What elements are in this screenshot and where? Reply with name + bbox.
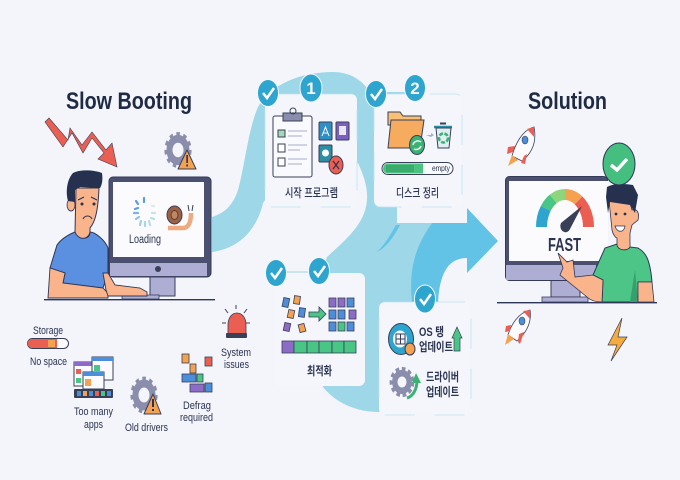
happy person — [558, 143, 654, 302]
check badge — [414, 285, 436, 313]
icon: recycle bin — [434, 124, 452, 148]
neck and face — [609, 200, 639, 250]
number badge 2: 2 — [410, 79, 420, 98]
hair — [67, 170, 102, 202]
check badge — [366, 80, 404, 108]
loading label: Loading — [129, 234, 161, 246]
icon: rocket bottom — [505, 310, 530, 345]
label: 디스크 정리 — [396, 186, 439, 200]
storage item: No space — [30, 356, 67, 368]
floor line left — [44, 299, 215, 300]
label: OS update: 업데이트 — [419, 340, 453, 354]
panel: step 2 disk cleanup — [366, 74, 462, 207]
label: OS update — [419, 325, 453, 354]
storage bar: empty — [432, 164, 450, 173]
defrag required item: Defrag — [183, 400, 211, 412]
hair — [606, 184, 638, 213]
left arm — [48, 268, 108, 298]
FAST label: FAST — [548, 235, 581, 255]
system issues item: issues — [224, 359, 249, 371]
heading: Solution: Solution — [528, 88, 607, 115]
too many apps item — [74, 357, 113, 431]
spinner — [134, 198, 155, 226]
icon: green up arrow — [452, 327, 462, 351]
label: driver update: 드라이버 — [426, 370, 459, 384]
storage item — [28, 325, 68, 368]
flow arrow: dark blue — [377, 208, 498, 302]
too many apps item: apps — [84, 419, 103, 431]
icon: driver gear — [391, 369, 421, 398]
icon: app tiles — [319, 122, 349, 174]
check badge — [258, 80, 278, 106]
right arm — [103, 273, 147, 296]
icon: lightning bolt — [608, 318, 627, 361]
ear — [67, 199, 75, 211]
icon: snail — [167, 205, 193, 228]
torso — [593, 244, 652, 302]
icon: windows update — [388, 324, 415, 355]
gauge needle — [560, 206, 582, 232]
neck and face — [75, 188, 99, 238]
system issues item: System — [221, 347, 251, 359]
too many apps item: Too many — [74, 406, 113, 418]
sad face — [78, 197, 97, 219]
torso — [50, 232, 108, 288]
check badges — [266, 258, 330, 286]
smile — [615, 213, 626, 231]
green check badge — [603, 143, 635, 185]
defrag required item — [180, 354, 213, 424]
label: 시작 프로그램 — [285, 186, 338, 200]
panel: step 4 updates — [379, 285, 471, 415]
system issues item — [221, 305, 251, 371]
panel: step 3 optimize — [266, 258, 365, 386]
floor line right — [497, 302, 657, 303]
number badge 1: 1 — [306, 79, 316, 98]
background patch under card 2 — [397, 200, 467, 223]
icon: falling red arrow — [45, 118, 117, 167]
left monitor — [109, 177, 211, 299]
heading: Slow Booting: Slow Booting — [66, 88, 192, 115]
shirt shadow — [630, 270, 638, 302]
icon: checklist — [273, 108, 312, 177]
speed gauge — [542, 194, 588, 227]
old drivers item: Old drivers — [125, 422, 168, 434]
progress bar — [282, 341, 356, 353]
arrow small — [426, 133, 434, 137]
icon: scattered blocks to grid — [282, 296, 356, 333]
defrag required item: required — [180, 412, 213, 424]
label: driver update: 업데이트 — [426, 385, 459, 399]
sad person — [48, 170, 147, 298]
label: 최적화 — [307, 363, 332, 378]
icon: gear with warning — [166, 134, 196, 169]
label: driver update — [426, 370, 459, 399]
label: OS update: OS 탱 — [419, 325, 444, 339]
storage item: Storage — [33, 325, 63, 337]
icon: rocket top — [507, 127, 535, 166]
flow ribbon: light blue — [212, 72, 432, 412]
right monitor — [506, 176, 608, 302]
old drivers item — [125, 379, 168, 434]
icon: folder — [388, 112, 424, 154]
panel: step 1 startup programs — [258, 74, 357, 207]
right arm — [638, 282, 654, 302]
pointing arm and hand — [558, 253, 603, 302]
